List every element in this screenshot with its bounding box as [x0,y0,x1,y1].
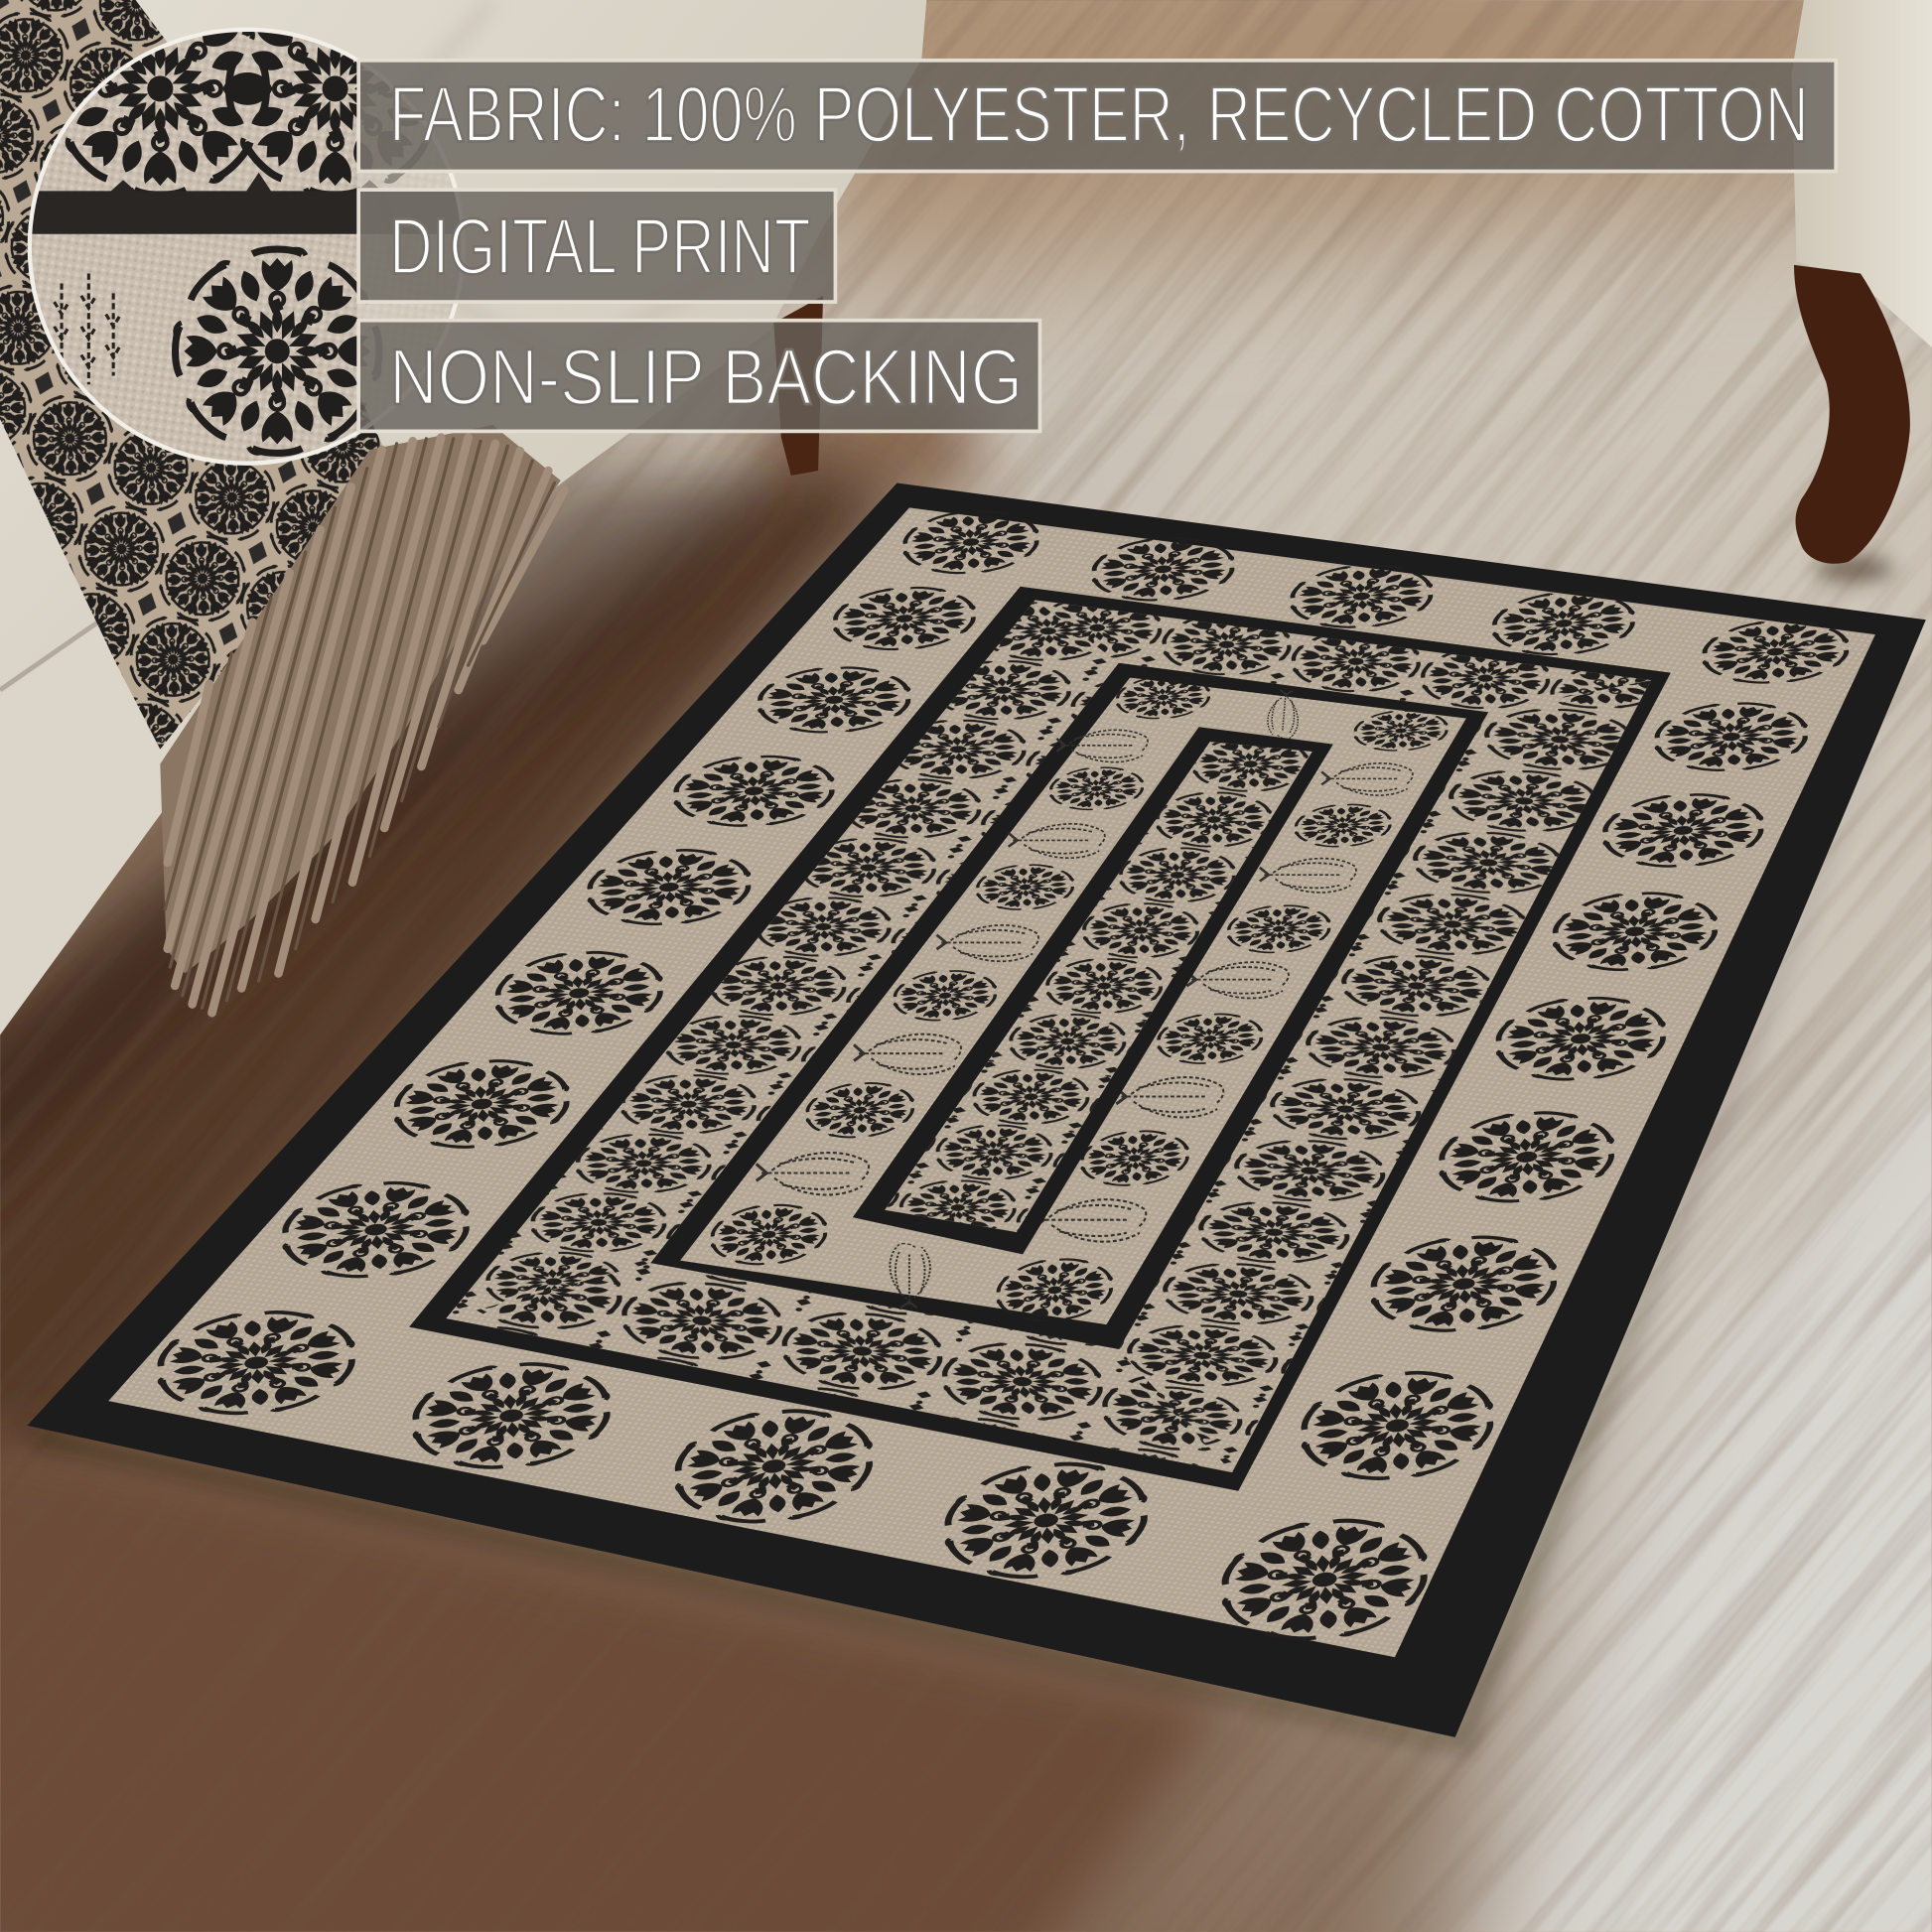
third inner black band [853,727,1333,1254]
second inner black band [650,663,1488,1349]
callout circle: fabric close-up [28,28,460,466]
right chair seat [1792,0,1932,347]
label panel: digital print: DIGITAL PRINT [389,203,811,291]
throw fringe [160,425,564,1013]
dense medallion ring [446,600,1651,1472]
rug outer black border [27,483,1926,1737]
rug beige field [108,507,1875,1657]
label panel: non-slip backing: NON-SLIP BACKING [389,333,1023,421]
label panel: digital print [358,190,835,302]
rug shadow [27,622,1928,1749]
throw blanket [0,0,384,750]
outer medallion column: left [126,580,999,1425]
outer medallion row: top [882,503,1872,690]
sofa leg [773,296,823,476]
inner medallions [692,671,1463,1327]
label panel: non-slip backing [358,321,1039,431]
willow tree motifs [757,689,1413,1308]
rug [27,483,1926,1737]
first inner black band [409,587,1671,1491]
inner beige field [680,678,1466,1324]
right chair leg [1794,265,1910,582]
central dense medallion strip [885,742,1312,1232]
sofa on the left [0,0,926,1035]
outer medallion row: bottom [381,1352,1460,1651]
outer medallion column: right [1271,695,1832,1490]
